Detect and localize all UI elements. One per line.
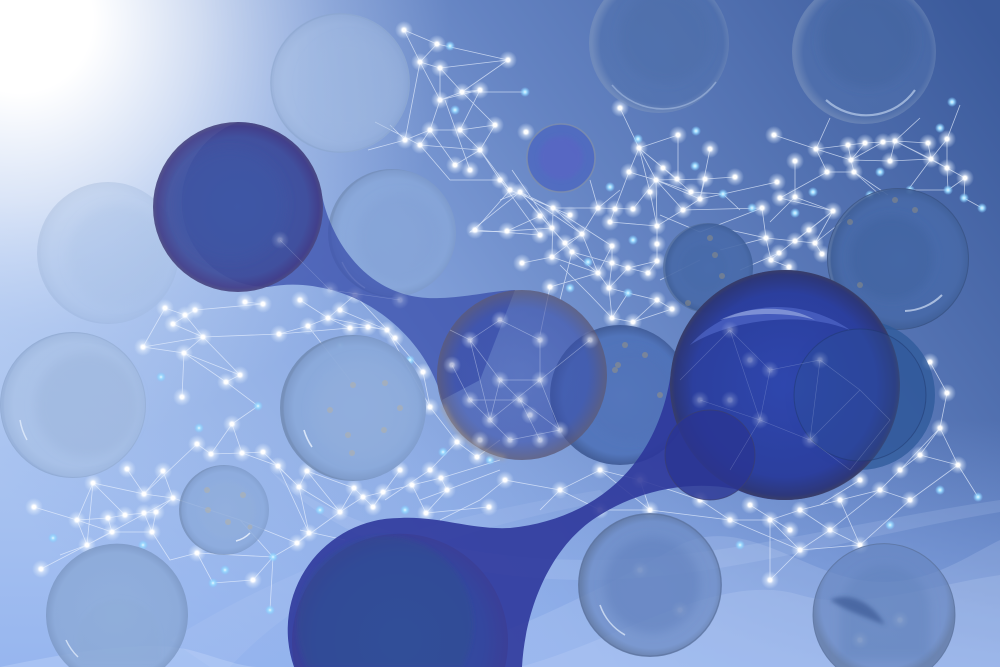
bubble: centre upper [328,169,456,297]
network seen through spheres [271,231,890,470]
bubble: right lower behind sphere [785,320,935,470]
flowing waves at bottom [0,470,1000,667]
bubble: top left pale [270,13,410,153]
bubble: small violet [527,124,595,192]
bubble: centre left [280,335,426,481]
blob: lower molecule with neck [288,270,926,667]
bubble: centre overlapping [550,325,690,465]
bubble: centre right small [663,223,753,313]
bubble: right large [827,188,969,330]
bubble: bottom left [46,544,188,667]
bubble: bottom centre [578,513,722,657]
bubble: small lower left [179,465,269,555]
blob: upper molecule with neck [153,122,607,460]
bubble: bottom right [813,544,955,667]
bubble: far left upper [37,182,179,324]
bubble: top right [792,0,936,124]
bubble: far left lower [0,332,146,478]
bubble: top centre right [589,0,729,113]
